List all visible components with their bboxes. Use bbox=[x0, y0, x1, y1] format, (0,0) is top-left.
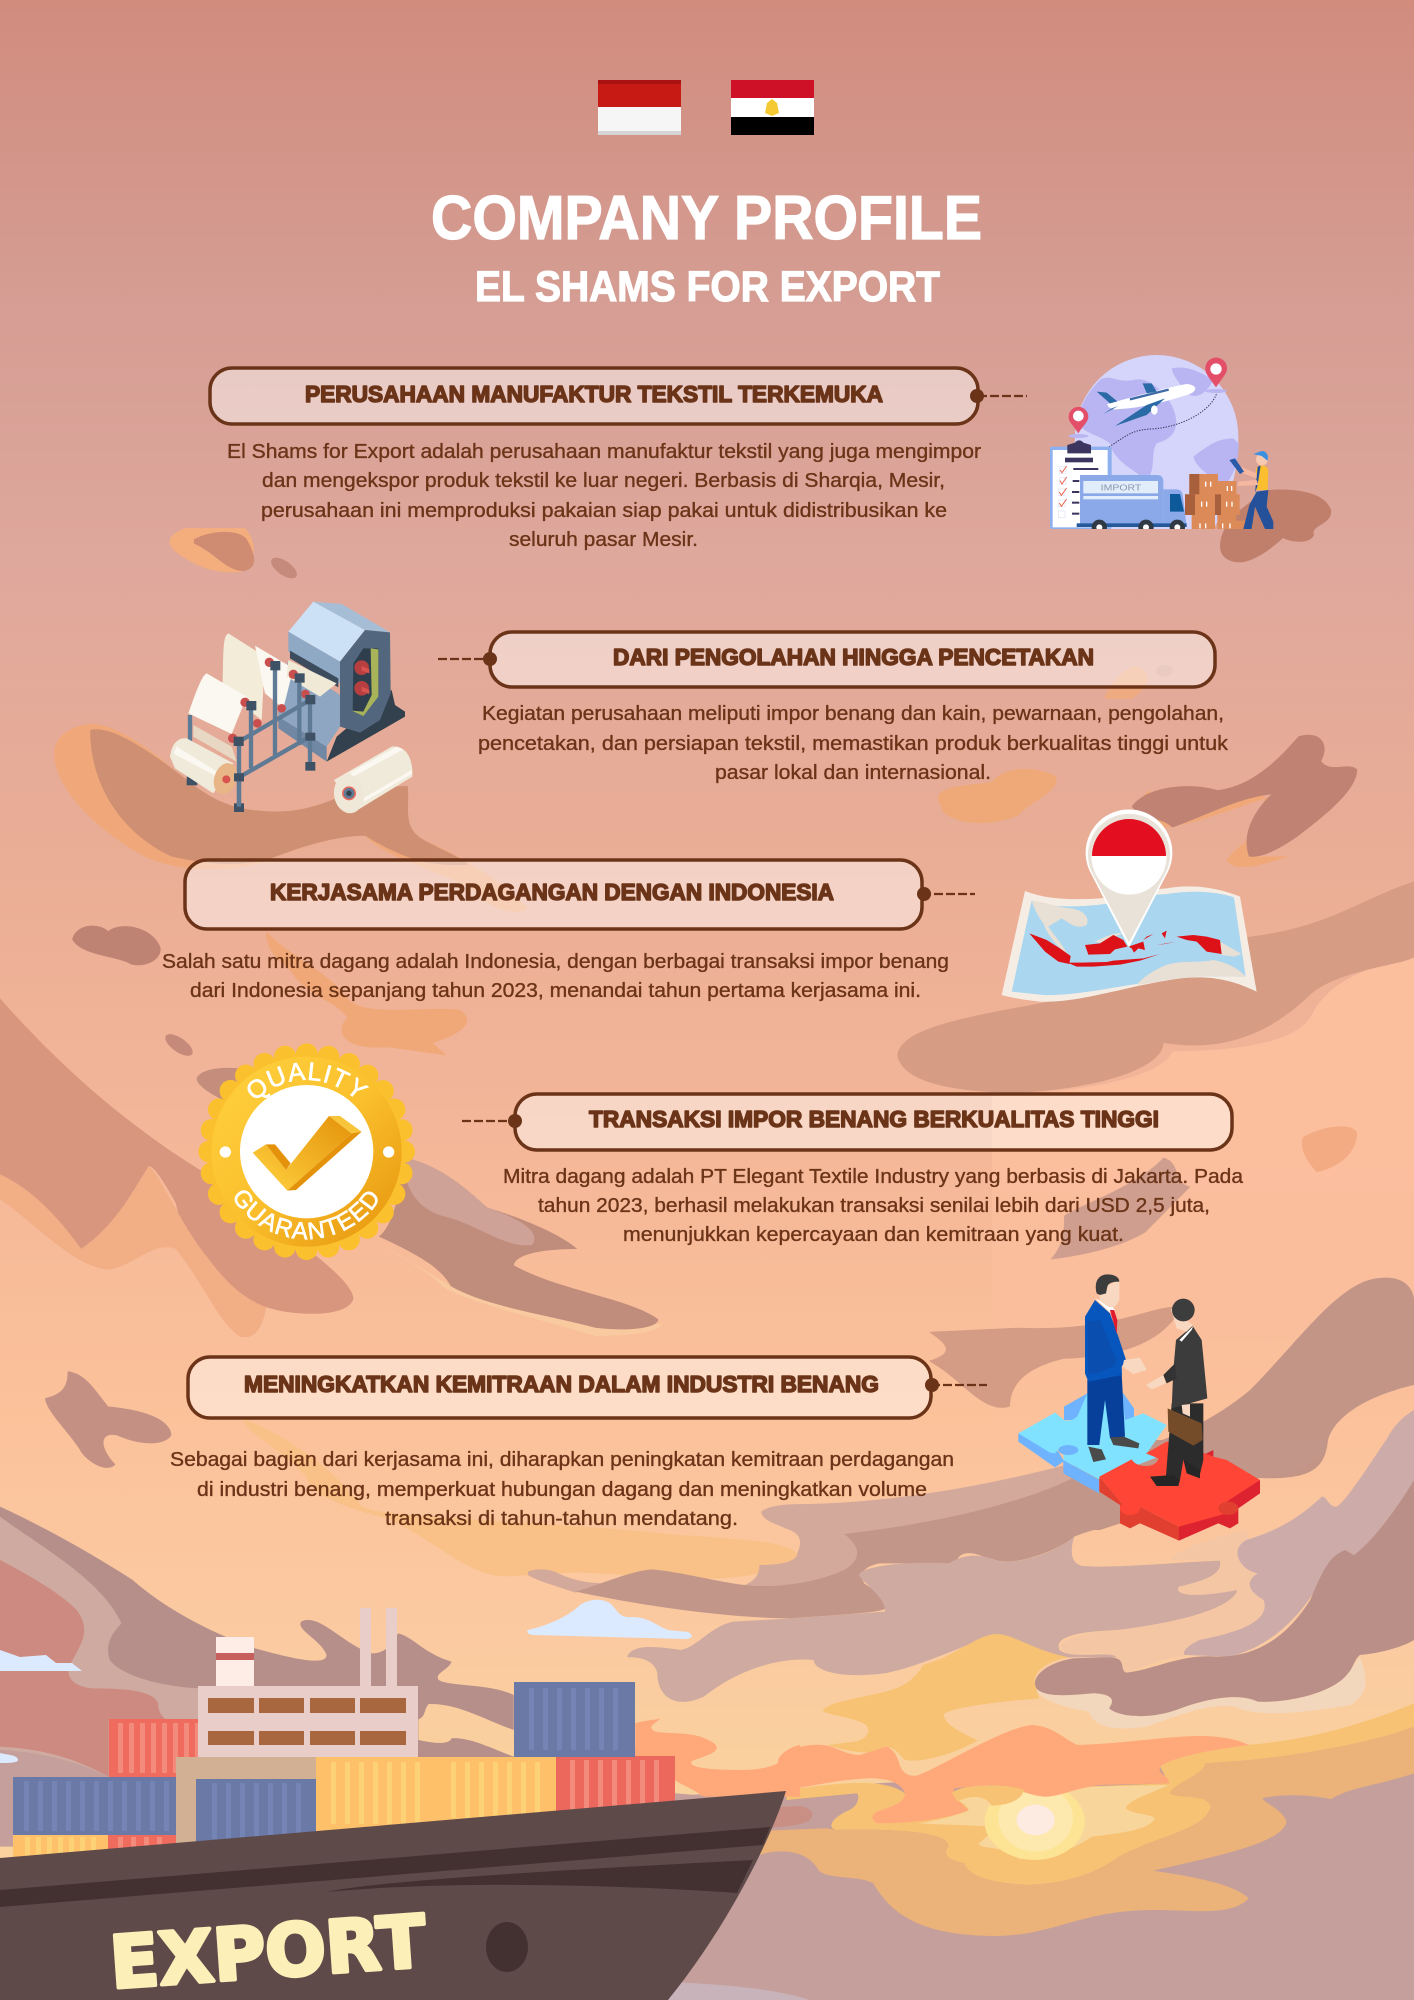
text block: Kegiatan perusahaan meliputi impor benang dan kain, pewarnaan, pengolahan, bbox=[482, 703, 1224, 725]
red puzzle bbox=[1099, 1442, 1260, 1541]
small cloud specks bbox=[162, 554, 300, 1060]
text block: perusahaan ini memproduksi pakaian siap pakai untuk didistribusikan ke bbox=[261, 500, 947, 522]
icon: textile machine bbox=[170, 602, 412, 815]
background clouds lower left bbox=[0, 1507, 800, 1847]
truck: IMPORT bbox=[1101, 484, 1141, 493]
flag: Egypt bbox=[731, 80, 814, 135]
cargo ship with containers bbox=[0, 1608, 786, 2000]
heading: MENINGKATKAN KEMITRAAN DALAM INDUSTRI BENANG bbox=[244, 1371, 879, 1397]
text block: di industri benang, memperkuat hubungan dagang dan meningkatkan volume bbox=[197, 1479, 927, 1501]
blue puzzle bbox=[1018, 1393, 1167, 1493]
text block bbox=[162, 951, 949, 1002]
background clouds lower centre bbox=[528, 1410, 1414, 1729]
title: COMPANY PROFILE bbox=[431, 184, 982, 253]
text block: transaksi di tahun-tahun mendatang. bbox=[385, 1508, 738, 1530]
text block bbox=[227, 441, 981, 551]
text block: Salah satu mitra dagang adalah Indonesia, dengan berbagai transaksi impor benang bbox=[162, 951, 949, 973]
pin right bbox=[1205, 357, 1227, 393]
heading: TRANSAKSI IMPOR BENANG BERKUALITAS TINGGI bbox=[589, 1106, 1159, 1132]
text block: El Shams for Export adalah perusahaan manufaktur tekstil yang juga mengimpor bbox=[227, 441, 981, 463]
sun bbox=[985, 1783, 1085, 1860]
worker bbox=[1229, 451, 1273, 529]
panel: kerjasama Indonesia bbox=[162, 860, 975, 1002]
icon: Indonesia map with pin bbox=[1002, 809, 1257, 1002]
heading: PERUSAHAAN MANUFAKTUR TEKSTIL TERKEMUKA bbox=[305, 381, 883, 407]
text block: tahun 2023, berhasil melakukan transaksi senilai lebih dari USD 2,5 juta, bbox=[538, 1195, 1210, 1217]
subtitle: EL SHAMS FOR EXPORT bbox=[475, 263, 940, 311]
cardboard boxes bbox=[1185, 474, 1253, 529]
panel: pengolahan bbox=[438, 632, 1229, 784]
truck bbox=[1077, 475, 1187, 535]
text block: seluruh pasar Mesir. bbox=[509, 529, 698, 551]
clipboard bbox=[1050, 440, 1112, 529]
text block: Mitra dagang adalah PT Elegant Textile Industry yang berbasis di Jakarta. Pada bbox=[503, 1166, 1244, 1188]
background clouds middle bbox=[0, 998, 1357, 1579]
factory superstructure bbox=[198, 1608, 418, 1758]
airplane bbox=[1097, 383, 1195, 426]
icon: handshake on puzzle pieces bbox=[1018, 1274, 1260, 1541]
dark cloud band right bbox=[1060, 1278, 1414, 1530]
text block bbox=[170, 1449, 954, 1530]
pin left bbox=[1068, 407, 1088, 438]
text block: menunjukkan kepercayaan dan kemitraan yang kuat. bbox=[623, 1224, 1124, 1246]
heading: DARI PENGOLAHAN HINGGA PENCETAKAN bbox=[613, 644, 1094, 670]
businessman blue bbox=[1085, 1274, 1147, 1462]
text block: pasar lokal dan internasional. bbox=[715, 762, 991, 784]
clouds pale blue bbox=[0, 1600, 692, 1763]
text block bbox=[503, 1166, 1244, 1246]
businessman dark bbox=[1146, 1299, 1207, 1486]
panel: transaksi impor bbox=[462, 1094, 1244, 1246]
hull bbox=[0, 1791, 786, 2000]
background clouds and sun lower right bbox=[609, 1634, 1414, 2000]
icon: quality guaranteed badge: GUARANTEED bbox=[234, 1190, 378, 1240]
background clouds upper bbox=[54, 528, 1414, 1450]
heading: KERJASAMA PERDAGANGAN DENGAN INDONESIA bbox=[270, 879, 834, 905]
panel: kemitraan bbox=[170, 1357, 987, 1530]
text block: dan mengekspor produk tekstil ke luar negeri. Berbasis di Sharqia, Mesir, bbox=[262, 470, 945, 492]
porthole bbox=[486, 1922, 528, 1972]
text block: pencetakan, dan persiapan tekstil, memastikan produk berkualitas tinggi untuk bbox=[478, 733, 1229, 755]
text block: Sebagai bagian dari kerjasama ini, diharapkan peningkatan kemitraan perdagangan bbox=[170, 1449, 954, 1471]
panel: perusahaan manufaktur bbox=[210, 368, 1027, 551]
flag: Indonesia bbox=[598, 80, 681, 135]
icon: export logistics globe, truck, worker bbox=[1050, 355, 1273, 535]
cloud beside worker bbox=[1220, 490, 1331, 562]
text block bbox=[478, 703, 1229, 784]
badge text: QUALITY bbox=[248, 1062, 370, 1098]
text block: dari Indonesia sepanjang tahun 2023, menandai tahun pertama kerjasama ini. bbox=[190, 980, 921, 1002]
containers bbox=[13, 1682, 675, 1859]
check mark bbox=[253, 1116, 362, 1191]
icon: quality guaranteed badge bbox=[198, 1043, 415, 1260]
